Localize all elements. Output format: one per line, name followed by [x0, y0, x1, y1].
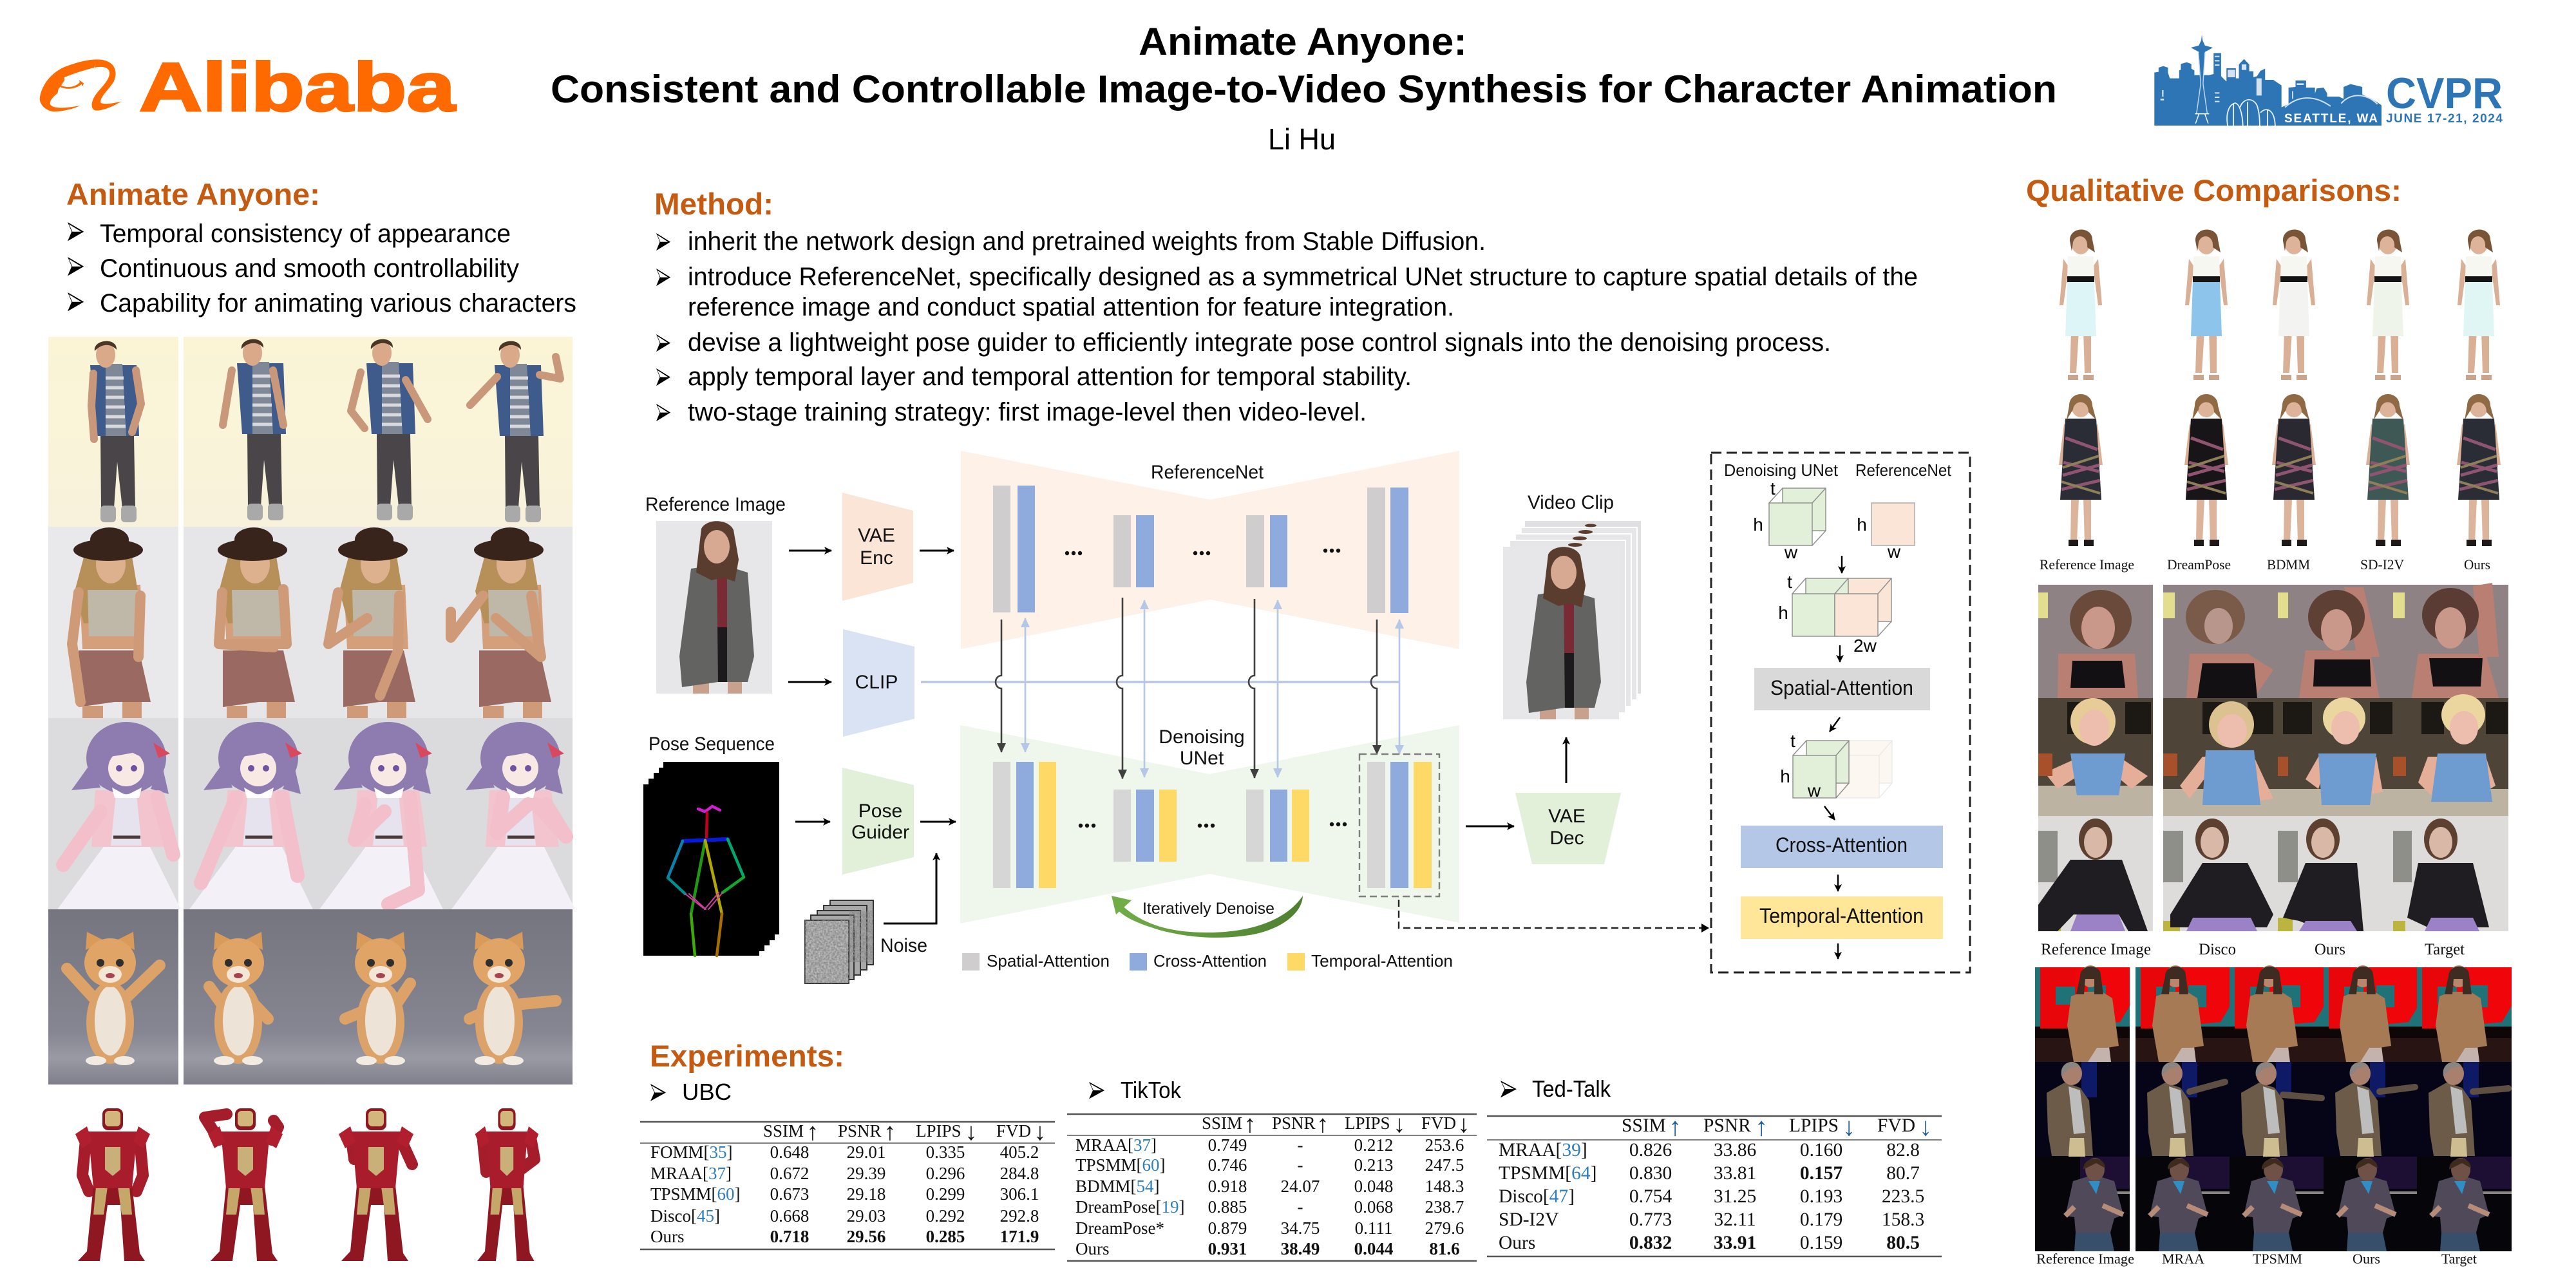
arrows: cross connections	[996, 598, 1399, 779]
ReferenceNet bowtie	[961, 451, 1459, 649]
table: TikTok: ↑	[1316, 1111, 1329, 1138]
table: Ted-Talk: 158.3	[1882, 1209, 1924, 1230]
Denoising UNet blocks	[993, 762, 1432, 888]
table: UBC: 0.292	[926, 1206, 965, 1226]
table: UBC: FOMM[35]	[650, 1142, 733, 1162]
table: Ted-Talk: 0.832	[1629, 1233, 1672, 1253]
bullet list: inherit the network design and pretrained weights from Stable Diffusion.	[688, 227, 1486, 256]
subheading	[1089, 1077, 1182, 1103]
legend	[962, 951, 1453, 971]
Pose Guider: Pose	[858, 800, 902, 822]
table: TikTok: ↓	[1394, 1111, 1405, 1138]
table: UBC: ↑	[884, 1119, 896, 1146]
table: TikTok: -	[1297, 1155, 1303, 1175]
cube 3: h	[1780, 766, 1790, 786]
Spatial-Attention box	[1754, 668, 1930, 710]
label: Iteratively Denoise: Iteratively Denoise	[1142, 900, 1274, 918]
icon: Alibaba smile a	[40, 59, 121, 111]
cube 3	[1780, 731, 1892, 800]
title: Animate Anyone:	[1139, 20, 1467, 63]
logo: CVPR Seattle: CVPR	[2386, 69, 2503, 118]
CLIP encoder: CLIP	[855, 672, 898, 693]
VAE decoder	[1515, 793, 1621, 864]
table: TikTok: PSNR	[1272, 1113, 1316, 1133]
table: TikTok: 148.3	[1425, 1177, 1464, 1196]
logo: CVPR Seattle: JUNE 17-21, 2024	[2386, 112, 2503, 126]
bullet list: introduce ReferenceNet, specifically designed as a symmetrical UNet structure to capture spatial details of the	[688, 263, 1918, 291]
subheading: Ted-Talk	[1532, 1075, 1611, 1102]
panel: Method	[654, 187, 1918, 426]
table: TikTok: 38.49	[1281, 1239, 1320, 1258]
label: Denoising UNet	[1724, 460, 1839, 480]
image row: woman with hat	[48, 527, 573, 719]
table: TikTok: SSIM	[1202, 1113, 1242, 1133]
highlight dashed box	[1359, 754, 1439, 896]
table: Ted-Talk: Ours	[1499, 1233, 1535, 1253]
bullet list: Capability for animating various characters	[100, 289, 576, 317]
legend: Cross-Attention	[1153, 951, 1267, 971]
table: Ted-Talk: 31.25	[1714, 1186, 1756, 1207]
heading: Qualitative Comparisons:	[2026, 173, 2401, 207]
table: Ted-Talk: 80.5	[1886, 1233, 1920, 1253]
cube 1	[1753, 478, 1826, 562]
table: UBC: 0.718	[770, 1227, 809, 1246]
table: Ted-Talk: ↓	[1919, 1112, 1932, 1141]
cube 3: w	[1807, 781, 1821, 800]
table: Ted-Talk: LPIPS	[1789, 1115, 1839, 1136]
table: UBC: 306.1	[1000, 1184, 1039, 1204]
table: TikTok: 24.07	[1281, 1177, 1320, 1196]
table: UBC: Disco[45]	[650, 1206, 720, 1226]
table: Ted-Talk: 80.7	[1886, 1163, 1920, 1184]
table: Ted-Talk: Disco[47]	[1499, 1186, 1575, 1207]
row 3 figures	[2038, 819, 2489, 931]
captions: Ted-Talk	[2036, 1251, 2477, 1267]
noise stack	[805, 900, 873, 983]
table: UBC: 0.296	[926, 1164, 965, 1183]
table: UBC: ↓	[965, 1119, 978, 1146]
CLIP encoder	[843, 629, 914, 737]
VAE decoder: VAE	[1548, 806, 1586, 827]
captions: TikTok: Disco	[2199, 941, 2236, 958]
table: TikTok: ↑	[1244, 1111, 1256, 1138]
bullet list: devise a lightweight pose guider to efficiently integrate pose control signals into the denoising process.	[688, 328, 1831, 357]
table: UBC: PSNR	[838, 1121, 882, 1141]
table: TikTok: 247.5	[1425, 1155, 1464, 1175]
captions: UBC: BDMM	[2267, 556, 2310, 573]
table: TikTok: Ours	[1075, 1239, 1109, 1258]
connector arrowhead	[1701, 923, 1709, 933]
table: UBC: 292.8	[1000, 1206, 1039, 1226]
heading: Method:	[654, 187, 773, 221]
bullet list: Continuous and smooth controllability	[100, 254, 519, 283]
table: Ted-Talk	[1487, 1075, 1942, 1256]
table: UBC: 29.18	[847, 1184, 886, 1204]
bullet list	[656, 227, 1918, 426]
Cross-Attention box: Cross-Attention	[1776, 833, 1908, 857]
table: TikTok: 34.75	[1281, 1218, 1320, 1238]
cube 1: w	[1784, 542, 1798, 562]
table: TikTok: -	[1297, 1197, 1303, 1217]
table: Ted-Talk: 82.8	[1886, 1140, 1920, 1160]
table: TikTok: 0.931	[1208, 1239, 1247, 1258]
table: TikTok: FVD	[1421, 1113, 1456, 1133]
table: TikTok: DreamPose[19]	[1075, 1197, 1184, 1217]
captions: TikTok: Ours	[2315, 941, 2345, 958]
bullet list: two-stage training strategy: first image-level then video-level.	[688, 398, 1367, 426]
logo: CVPR Seattle	[2154, 35, 2503, 126]
table: Ted-Talk: TPSMM[64]	[1499, 1163, 1596, 1184]
table: Ted-Talk: 0.159	[1800, 1233, 1842, 1253]
label: Reference Image: Reference Image	[645, 494, 786, 515]
table: Ted-Talk: SSIM	[1622, 1115, 1666, 1136]
table: TikTok: 0.111	[1355, 1218, 1392, 1238]
captions: UBC: SD-I2V	[2360, 556, 2404, 573]
table: Ted-Talk: 0.830	[1629, 1163, 1672, 1184]
subheading	[650, 1079, 732, 1105]
table: UBC: 405.2	[1000, 1142, 1039, 1162]
Temporal-Attention box	[1741, 896, 1943, 939]
row 3	[2035, 1157, 2512, 1251]
table: UBC: FVD	[996, 1121, 1031, 1141]
table: Ted-Talk: SD-I2V	[1499, 1209, 1558, 1230]
table: TikTok: DreamPose*	[1075, 1218, 1164, 1238]
ellipsis dots	[1065, 549, 1347, 828]
label: Denoising UNet	[1159, 726, 1245, 769]
table: Ted-Talk: 0.754	[1629, 1186, 1672, 1207]
table: Ted-Talk: 32.11	[1714, 1209, 1756, 1230]
captions: Ted-Talk: Ours	[2353, 1251, 2380, 1267]
cube 1: h	[1753, 515, 1763, 535]
image row: patterned dresses	[2059, 394, 2501, 546]
captions: TikTok	[2041, 941, 2465, 958]
table: UBC: TPSMM[60]	[650, 1184, 741, 1204]
table: UBC: 0.335	[926, 1142, 965, 1162]
architecture diagram	[643, 451, 1970, 983]
table: UBC: 0.668	[770, 1206, 809, 1226]
pose skeleton	[668, 806, 744, 956]
row 2 figures	[2038, 694, 2508, 816]
captions: TikTok: Reference Image	[2041, 941, 2151, 958]
table: Ted-Talk: 33.91	[1714, 1233, 1756, 1253]
table: TikTok: BDMM[54]	[1075, 1177, 1160, 1196]
Cross-Attention box	[1741, 826, 1943, 868]
table: UBC: 29.01	[847, 1142, 886, 1162]
arrows: input flow	[788, 551, 1566, 923]
table: TikTok: 0.885	[1208, 1197, 1247, 1217]
VAE encoder: Enc	[860, 547, 893, 569]
table: Ted-Talk: ↑	[1755, 1112, 1768, 1141]
table: TikTok: 0.918	[1208, 1177, 1247, 1196]
ReferenceNet blocks	[993, 486, 1408, 613]
table: Ted-Talk: 0.826	[1629, 1140, 1672, 1160]
panel: temporal detail	[1711, 453, 1970, 972]
table: UBC: 29.56	[847, 1227, 886, 1246]
table: UBC: 0.648	[770, 1142, 809, 1162]
image row: iron man	[75, 1108, 538, 1261]
table: UBC	[640, 1079, 1055, 1249]
table: Ted-Talk: PSNR	[1703, 1115, 1751, 1136]
cube 1: t	[1770, 478, 1776, 498]
table: UBC: 284.8	[1000, 1164, 1039, 1183]
label: ReferenceNet	[1855, 460, 1952, 480]
row 1	[2035, 965, 2512, 1062]
captions: Ted-Talk: Reference Image	[2036, 1251, 2134, 1267]
table: Ted-Talk: 0.160	[1800, 1140, 1842, 1160]
cube 2	[1778, 572, 1891, 656]
table: Ted-Talk: ↓	[1842, 1112, 1855, 1141]
row 2	[2035, 1062, 2512, 1157]
Denoising UNet bowtie	[960, 725, 1459, 923]
table: UBC: 29.03	[847, 1206, 886, 1226]
label: ReferenceNet: ReferenceNet	[1151, 462, 1264, 483]
panel: Animate Anyone	[48, 177, 576, 1261]
table: TikTok: 0.213	[1354, 1155, 1393, 1175]
image grid: Ted-Talk	[2035, 965, 2512, 1251]
Pose Guider	[842, 768, 914, 875]
subheading: UBC	[682, 1079, 732, 1105]
table: TikTok	[1067, 1077, 1477, 1261]
image row: anime girl	[48, 718, 575, 909]
reference feature: w	[1887, 542, 1901, 562]
table: Ted-Talk: 0.773	[1629, 1209, 1672, 1230]
video clip stack	[1503, 521, 1641, 719]
image row: kitten	[48, 909, 573, 1084]
image row: man	[48, 337, 573, 527]
table: TikTok: 0.068	[1354, 1197, 1393, 1217]
row 1 figures	[2038, 583, 2499, 698]
arrow: iteratively denoise	[1112, 896, 1303, 938]
heading: Animate Anyone:	[66, 177, 320, 211]
subheading	[1501, 1075, 1611, 1102]
table: TikTok: 0.044	[1354, 1239, 1393, 1258]
image grid: TikTok	[2038, 583, 2508, 931]
pose sequence stack	[643, 762, 779, 956]
captions: UBC: DreamPose	[2167, 556, 2231, 573]
table: UBC: Ours	[650, 1227, 684, 1246]
table: UBC: 0.299	[926, 1184, 965, 1204]
image row: white dresses	[2060, 229, 2500, 380]
label: Noise: Noise	[880, 935, 927, 956]
table: UBC: MRAA[37]	[650, 1164, 732, 1183]
captions: Ted-Talk: MRAA	[2162, 1251, 2204, 1267]
table: UBC: 0.672	[770, 1164, 809, 1183]
captions: UBC	[2040, 556, 2490, 573]
table: TikTok: TPSMM[60]	[1075, 1155, 1166, 1175]
table: TikTok: 0.746	[1208, 1155, 1247, 1175]
table: Ted-Talk: ↑	[1669, 1112, 1681, 1141]
cube 3: t	[1790, 731, 1795, 751]
table: TikTok: 253.6	[1425, 1135, 1464, 1155]
table: TikTok: LPIPS	[1345, 1113, 1390, 1133]
table: UBC: LPIPS	[916, 1121, 961, 1141]
bullet list	[68, 220, 576, 317]
VAE encoder: VAE	[858, 525, 895, 546]
table: UBC: 0.673	[770, 1184, 809, 1204]
Temporal-Attention box: Temporal-Attention	[1759, 904, 1924, 927]
table: Ted-Talk: 33.81	[1714, 1163, 1756, 1184]
image: reference person	[656, 521, 772, 694]
captions: Ted-Talk: Target	[2441, 1251, 2477, 1267]
bullet list: reference image and conduct spatial attention for feature integration.	[688, 293, 1454, 321]
table: UBC: ↓	[1034, 1119, 1046, 1146]
label: Denoising UNet: Denoising	[1159, 726, 1245, 748]
table: TikTok: 0.048	[1354, 1177, 1393, 1196]
table: Ted-Talk: 0.179	[1800, 1209, 1842, 1230]
bullet list: apply temporal layer and temporal attention for temporal stability.	[688, 363, 1412, 391]
VAE encoder	[842, 493, 913, 601]
table: Ted-Talk: FVD	[1877, 1115, 1915, 1136]
table: TikTok: ↓	[1458, 1111, 1470, 1138]
table: UBC: 171.9	[1000, 1227, 1039, 1246]
Spatial-Attention box: Spatial-Attention	[1770, 676, 1913, 699]
bullet list: Temporal consistency of appearance	[100, 220, 511, 248]
table: Ted-Talk: 223.5	[1882, 1186, 1924, 1207]
author: Li Hu	[1268, 122, 1336, 156]
CLIP connector line	[921, 681, 1399, 683]
legend: Spatial-Attention	[987, 951, 1110, 971]
reference feature	[1857, 503, 1915, 562]
table: TikTok: -	[1297, 1135, 1303, 1155]
table: UBC: ↑	[806, 1119, 819, 1146]
label: Video Clip: Video Clip	[1528, 492, 1614, 513]
icon: Seattle skyline	[2154, 35, 2382, 126]
subheading: TikTok	[1121, 1077, 1182, 1103]
cube 2: 2w	[1853, 636, 1877, 656]
panel: Experiments	[640, 1039, 1942, 1261]
cube 2: t	[1787, 572, 1792, 592]
logo: Alibaba	[40, 48, 457, 126]
table: TikTok: 0.212	[1354, 1135, 1393, 1155]
heading: Experiments:	[650, 1039, 844, 1073]
captions: UBC: Ours	[2464, 556, 2490, 573]
cube 2: h	[1778, 603, 1788, 623]
VAE decoder: Dec	[1549, 828, 1584, 849]
table: TikTok: 279.6	[1425, 1218, 1464, 1238]
dashed connector	[1399, 900, 1707, 928]
captions: Ted-Talk: TPSMM	[2253, 1251, 2302, 1267]
table: TikTok: 81.6	[1429, 1239, 1460, 1258]
title: Consistent and Controllable Image-to-Video Synthesis for Character Animation	[551, 68, 2057, 111]
legend: Temporal-Attention	[1311, 951, 1453, 971]
title	[551, 20, 2057, 111]
table: UBC: 0.285	[926, 1227, 965, 1246]
table: Ted-Talk: 33.86	[1714, 1140, 1756, 1160]
label: Denoising UNet: UNet	[1180, 748, 1224, 769]
text: SEATTLE, WA	[2284, 112, 2378, 126]
table: Ted-Talk: 0.193	[1800, 1186, 1842, 1207]
reference feature: h	[1857, 515, 1867, 535]
label: Pose Sequence: Pose Sequence	[649, 734, 775, 755]
table: Ted-Talk: MRAA[39]	[1499, 1140, 1587, 1160]
table: TikTok: 0.749	[1208, 1135, 1247, 1155]
captions: TikTok: Target	[2425, 941, 2465, 958]
table: Ted-Talk: 0.157	[1800, 1163, 1842, 1184]
arrows in detail panel	[1824, 556, 1842, 959]
table: UBC: SSIM	[763, 1121, 804, 1141]
table: TikTok: 238.7	[1425, 1197, 1464, 1217]
captions: UBC: Reference Image	[2040, 556, 2134, 573]
panel: Qualitative Comparisons	[2026, 173, 2512, 1267]
table: UBC: 29.39	[847, 1164, 886, 1183]
table: TikTok: MRAA[37]	[1075, 1135, 1157, 1155]
table: TikTok: 0.879	[1208, 1218, 1247, 1238]
Pose Guider: Guider	[851, 822, 909, 843]
wordmark: Alibaba	[139, 48, 457, 126]
